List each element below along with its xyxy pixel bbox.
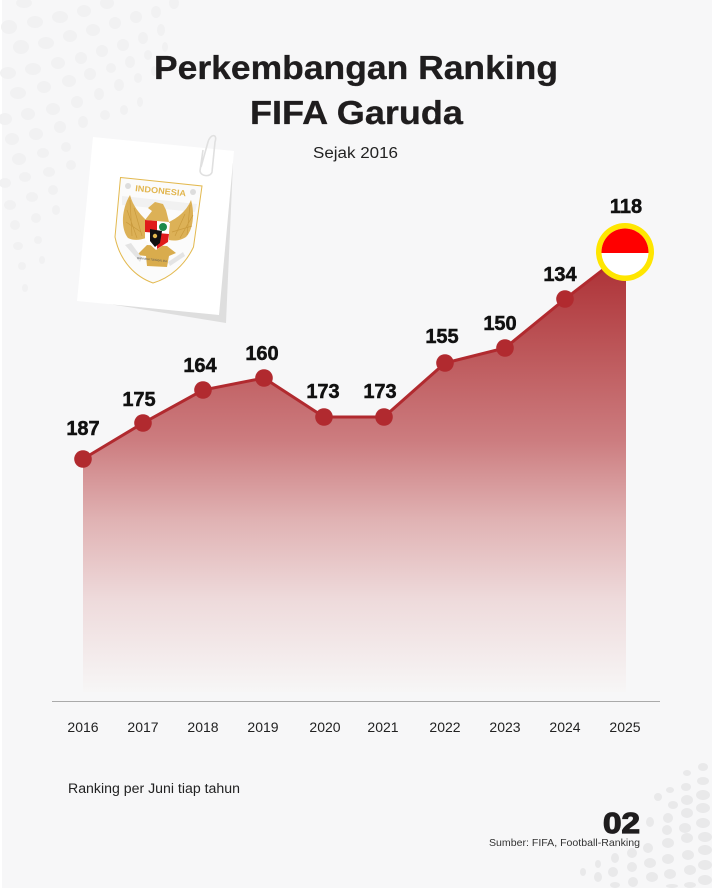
source: Sumber: FIFA, Football-Ranking: [489, 837, 640, 849]
footnote: Ranking per Juni tiap tahun: [68, 781, 240, 796]
note card with emblem: [77, 136, 234, 323]
x axis year labels: 2019: [247, 719, 279, 735]
title: FIFA Garuda: [250, 94, 464, 131]
data labels: 155: [425, 326, 459, 348]
title: Perkembangan Ranking: [154, 49, 558, 86]
x axis year labels: 2021: [367, 719, 399, 735]
icon: Indonesia football emblem: BHINNEKA TUNGGAL IKA: [137, 256, 167, 263]
x axis year labels: 2016: [67, 719, 99, 735]
subtitle: Sejak 2016: [313, 145, 398, 162]
data labels: 118: [610, 196, 642, 218]
data labels: [66, 196, 642, 440]
data labels: 187: [66, 418, 100, 440]
x axis baseline: [52, 700, 660, 702]
data labels: 134: [543, 264, 578, 286]
title: [154, 49, 558, 131]
data labels: 160: [245, 343, 279, 365]
data labels: 175: [122, 389, 156, 411]
icon: Indonesia football emblem: [115, 178, 202, 283]
icon: paperclip: [200, 136, 216, 176]
x axis year labels: 2024: [549, 719, 581, 735]
data labels: 164: [183, 355, 218, 377]
x axis year labels: 2025: [609, 719, 641, 735]
x axis year labels: 2022: [429, 719, 461, 735]
x axis year labels: [67, 719, 641, 735]
x axis year labels: 2020: [309, 719, 341, 735]
data labels: 173: [363, 381, 397, 403]
x axis year labels: 2023: [489, 719, 521, 735]
data labels: 173: [306, 381, 340, 403]
x axis year labels: 2017: [127, 719, 159, 735]
area chart: ranking trend: [74, 252, 626, 692]
data labels: 150: [483, 313, 517, 335]
page number: 02: [603, 808, 640, 840]
x axis year labels: 2018: [187, 719, 219, 735]
icon: Indonesia football emblem: INDONESIA: [135, 183, 187, 198]
icon: Indonesian flag marker: [596, 223, 654, 281]
